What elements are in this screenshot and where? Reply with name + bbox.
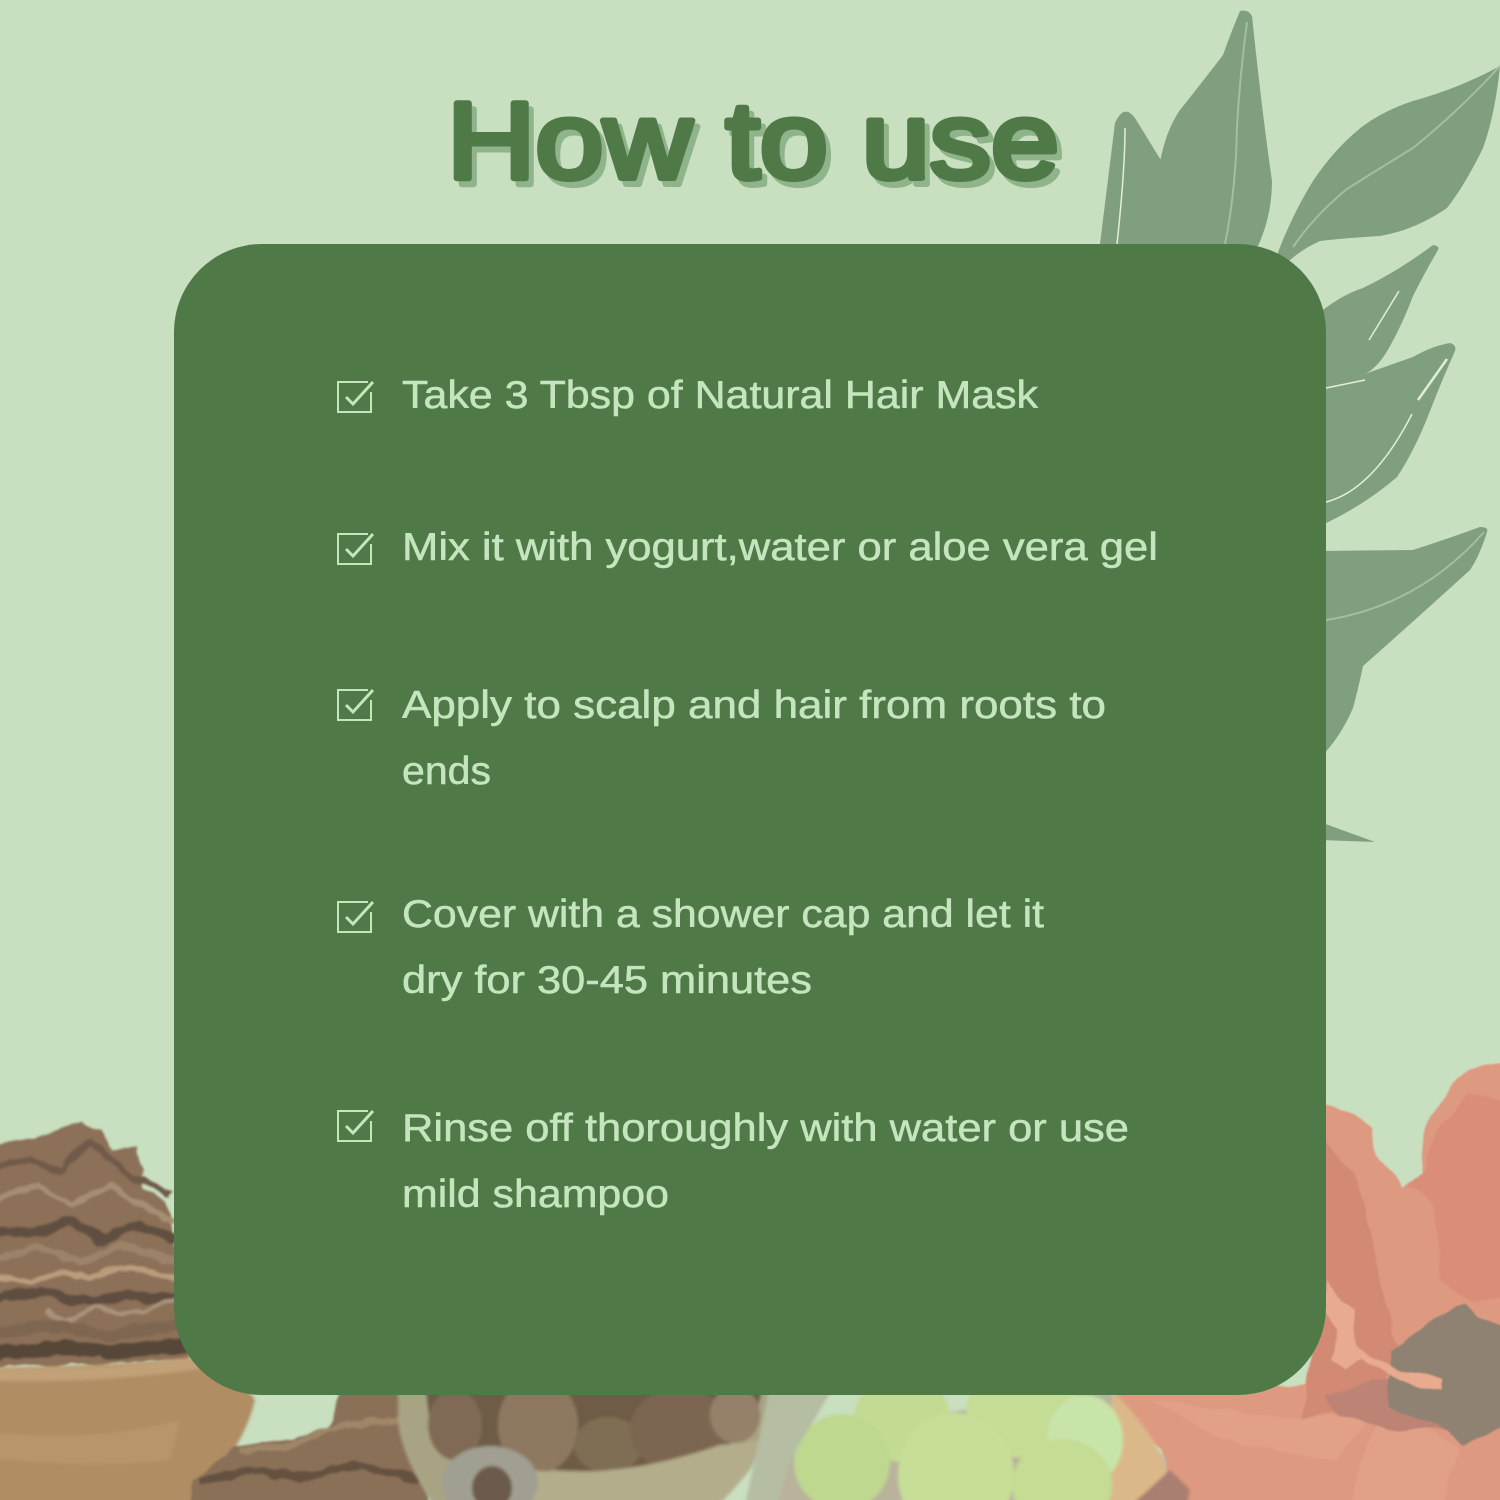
step 5 text: Rinse off thoroughly with water or use: [402, 1107, 1129, 1150]
step 5 text: mild shampoo: [402, 1173, 669, 1216]
step 2 text: Mix it with yogurt,water or aloe vera gel: [402, 526, 1158, 569]
photo: dried bark in wooden bowl: [0, 1120, 255, 1500]
photo: soapnuts in stone bowl: [398, 1377, 791, 1500]
photo: hibiscus flower: [1105, 1060, 1500, 1500]
icon: checkbox 3: [338, 690, 373, 720]
title shadow and heading: How to use: [447, 80, 1059, 202]
step 4 text: [402, 893, 1044, 1002]
title shadow and heading: How to use: [452, 86, 1064, 208]
step 3 text: ends: [402, 750, 491, 793]
icon: checkbox 4: [338, 902, 373, 932]
step 4 text: Cover with a shower cap and let it: [402, 893, 1044, 936]
icon: checkbox 2: [338, 534, 373, 564]
icon: checkbox 1: [338, 382, 373, 412]
step 3 text: Apply to scalp and hair from roots to: [402, 684, 1106, 727]
step 5 text: [402, 1107, 1129, 1216]
photo: amla fruits: [740, 1366, 1190, 1500]
step 3 text: [402, 684, 1106, 793]
step 4 text: dry for 30-45 minutes: [402, 959, 812, 1002]
photo: dried bark pile at bottom: [190, 1385, 430, 1500]
step 1 text: Take 3 Tbsp of Natural Hair Mask: [402, 374, 1039, 417]
icon: checkbox 5: [338, 1111, 373, 1141]
panel: instructions card: [174, 244, 1326, 1395]
leaf sprig illustration: [1100, 11, 1500, 842]
